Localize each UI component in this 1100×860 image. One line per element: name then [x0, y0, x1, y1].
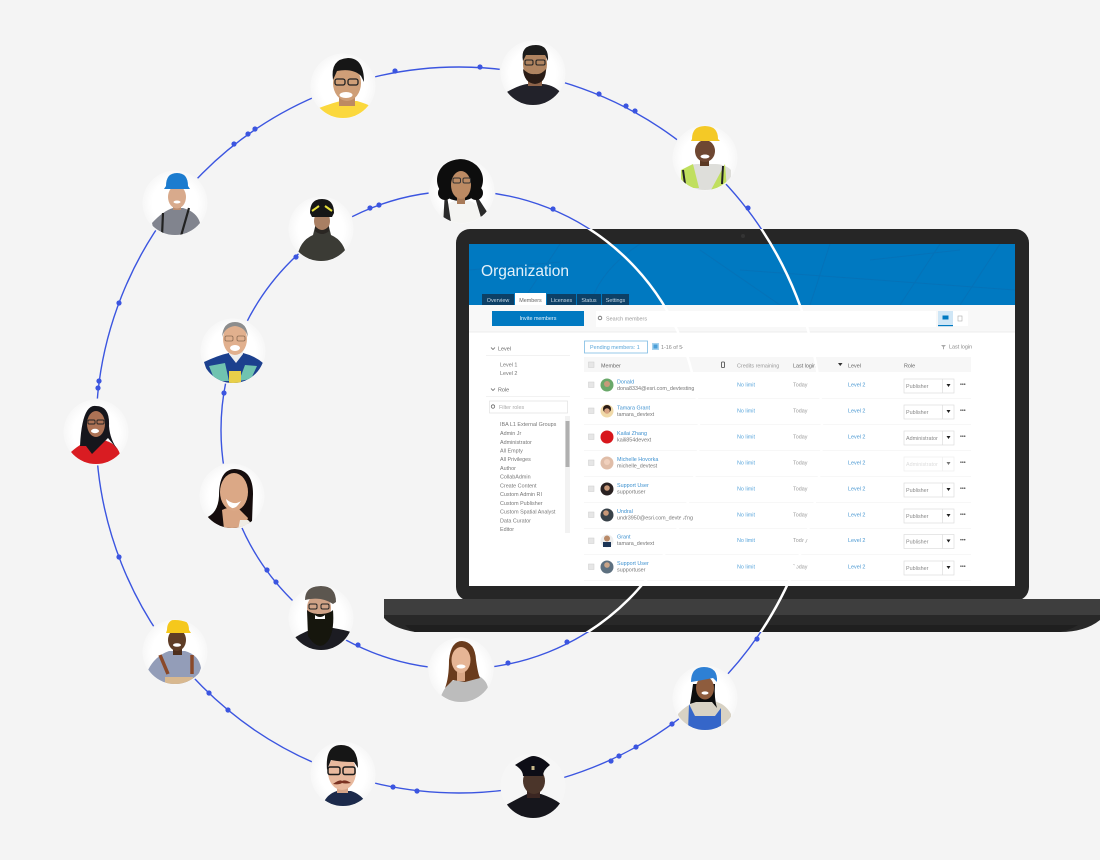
row: Grant [588, 534, 966, 548]
row: Kailai Zhang [588, 430, 966, 445]
row: Tamara Grant: Level 2 [848, 408, 865, 414]
row: Support User: Today [793, 486, 808, 492]
row: Kailai Zhang: Today [793, 434, 808, 440]
row: Support User 2 [588, 560, 966, 575]
row: Kailai Zhang: Level 2 [848, 434, 865, 440]
role list: IBA L1 External Groups [500, 422, 557, 428]
avatar: woman in yellow hard hat and vest [676, 126, 731, 190]
row: Tamara Grant: tamara_devtext [617, 412, 655, 418]
page title: Organization [481, 263, 569, 280]
camera [741, 234, 745, 238]
row: Undral: Today [793, 512, 808, 518]
row: Michelle Hovorka: ••• [960, 460, 966, 466]
pending members control: Pending members: 1 [590, 345, 640, 351]
navigation tabs: Members [519, 298, 542, 304]
role list: Administrator [500, 440, 532, 446]
avatar: woman with curly hair [428, 158, 496, 225]
row: Michelle Hovorka: michelle_devtest [617, 464, 658, 470]
avatar: woman with brown hair [428, 636, 494, 704]
row: Undral: ••• [960, 512, 966, 518]
row: Support User 2: Publisher [906, 566, 929, 572]
row: Undral: No limit [737, 512, 755, 518]
row: Tamara Grant: ••• [960, 408, 966, 414]
row: Michelle Hovorka: Michelle Hovorka [617, 457, 658, 463]
row: Support User 2: supportuser [617, 568, 646, 574]
row: Support User 2: ••• [960, 564, 966, 570]
role scrollbar [565, 416, 570, 533]
row: Undral: undr3950@esri.com_devtest'ng [617, 516, 693, 522]
role list: Editor [500, 527, 514, 533]
pending members control: 1-16 of 54 [661, 345, 685, 351]
sidebar filters: Level 2 [500, 371, 517, 377]
row: Undral [588, 508, 966, 523]
row: Support User 2: Today [793, 564, 808, 570]
row: Grant: Today [793, 538, 808, 544]
row: Grant: tamara_devtext [617, 541, 655, 547]
row: Grant: Grant [617, 534, 631, 540]
row: Support User: Support User [617, 483, 649, 489]
avatar: man in hawaiian shirt [204, 320, 263, 384]
row: Support User [588, 482, 966, 497]
pending members control [584, 341, 972, 353]
screen [469, 244, 1015, 586]
row: Kailai Zhang: Kailai Zhang [617, 431, 647, 437]
role list: Data Curator [500, 518, 531, 524]
navigation tabs: Licenses [551, 298, 572, 304]
row: Tamara Grant: Publisher [906, 410, 929, 416]
row: Support User: No limit [737, 486, 755, 492]
role list: Custom Publisher [500, 501, 543, 507]
role list [500, 422, 557, 533]
row dividers [584, 398, 971, 581]
role list: Admin Jr [500, 431, 521, 437]
row: Tamara Grant: No limit [737, 408, 755, 414]
role list: Custom Spatial Analyst [500, 510, 556, 516]
avatar: police officer [500, 754, 566, 819]
laptop [384, 229, 1100, 632]
role list: All Empty [500, 448, 523, 454]
avatar: woman in blue hard hat and overalls [678, 667, 731, 730]
row: Support User 2: Level 2 [848, 564, 865, 570]
row: Tamara Grant: Today [793, 408, 808, 414]
toolbar [469, 305, 1015, 332]
laptop lid [456, 229, 1029, 601]
row: Grant: No limit [737, 538, 755, 544]
navigation tabs: Settings [606, 298, 626, 304]
role list: CollabAdmin [500, 474, 531, 480]
toolbar: Invite members [520, 316, 557, 322]
row: Kailai Zhang: No limit [737, 434, 755, 440]
row: Support User: Level 2 [848, 486, 865, 492]
table header: Member [601, 364, 621, 370]
row: Michelle Hovorka: No limit [737, 460, 755, 466]
row: Support User: ••• [960, 486, 966, 492]
row: Grant: Level 2 [848, 538, 865, 544]
avatar: bearded man in cap [292, 586, 350, 650]
role list: Custom Admin RI [500, 492, 542, 498]
navigation tabs: Status [581, 298, 597, 304]
row: Support User: Publisher [906, 488, 929, 494]
role list: All Privileges [500, 457, 531, 463]
row: Donald: Level 2 [848, 382, 865, 388]
sidebar filters: Role [498, 388, 509, 394]
table header: Credits remaining [737, 364, 779, 370]
avatar: man in blue hard hat [148, 173, 201, 235]
row: Kailai Zhang: ••• [960, 434, 966, 440]
row: Donald: ••• [960, 382, 966, 388]
row: Grant: ••• [960, 538, 966, 544]
sidebar filters: Level 1 [500, 362, 517, 368]
avatar: man in black shirt [500, 45, 566, 105]
row: Kailai Zhang: Administrator [906, 436, 938, 442]
row: Donald [588, 378, 966, 393]
row: Kailai Zhang: kaili854devext [617, 438, 652, 444]
avatar: man in yellow hard hat and suspenders [148, 620, 201, 684]
row: Tamara Grant: Tamara Grant [617, 406, 650, 412]
row: Donald: Publisher [906, 384, 929, 390]
row: Donald: Today [793, 382, 808, 388]
sidebar filters: Level [498, 346, 511, 352]
avatar: firefighter [294, 199, 352, 261]
row: Donald: dona8334@esri.com_devtesting [617, 386, 694, 392]
sidebar filters: Filter roles [499, 405, 524, 411]
table header: Role [904, 364, 915, 370]
avatar: woman in red jacket [70, 398, 122, 466]
row: Support User 2: Support User [617, 561, 649, 567]
row: Donald: Donald [617, 380, 634, 386]
row: Michelle Hovorka: Administrator [906, 462, 938, 468]
avatar: man in yellow shirt [312, 58, 376, 118]
laptop base [384, 599, 1100, 632]
row: Undral: Level 2 [848, 512, 865, 518]
table header: Level [848, 364, 861, 370]
organization header banner [469, 244, 1015, 305]
pending members control: Last login [949, 344, 972, 350]
navigation tabs: Overview [487, 298, 509, 304]
search box [596, 311, 936, 327]
people avatars [62, 40, 738, 819]
row: Donald: No limit [737, 382, 755, 388]
role list: Create Content [500, 484, 537, 490]
white ring segments crossing the laptop [586, 229, 823, 632]
view toggles [938, 311, 968, 326]
row: Michelle Hovorka [588, 456, 966, 471]
row: Michelle Hovorka: Today [793, 460, 808, 466]
table header [584, 357, 971, 372]
inner network ring [221, 191, 699, 669]
row: Michelle Hovorka: Level 2 [848, 460, 865, 466]
row: Support User 2: No limit [737, 564, 755, 570]
avatar: smiling woman with dark hair [206, 464, 258, 528]
sidebar filters [486, 346, 570, 533]
row: Tamara Grant [588, 404, 966, 419]
role list: Author [500, 466, 516, 472]
navigation tabs [482, 293, 629, 305]
toolbar: Search members [606, 316, 647, 322]
row: Undral: Undral [617, 509, 633, 515]
row: Support User: supportuser [617, 490, 646, 496]
avatar: man with mustache [312, 745, 376, 806]
row: Undral: Publisher [906, 514, 929, 520]
outer network ring [95, 64, 822, 794]
row: Grant: Publisher [906, 540, 929, 546]
table header: Last login [793, 364, 816, 370]
invite members button [492, 311, 584, 326]
members table [584, 357, 971, 581]
